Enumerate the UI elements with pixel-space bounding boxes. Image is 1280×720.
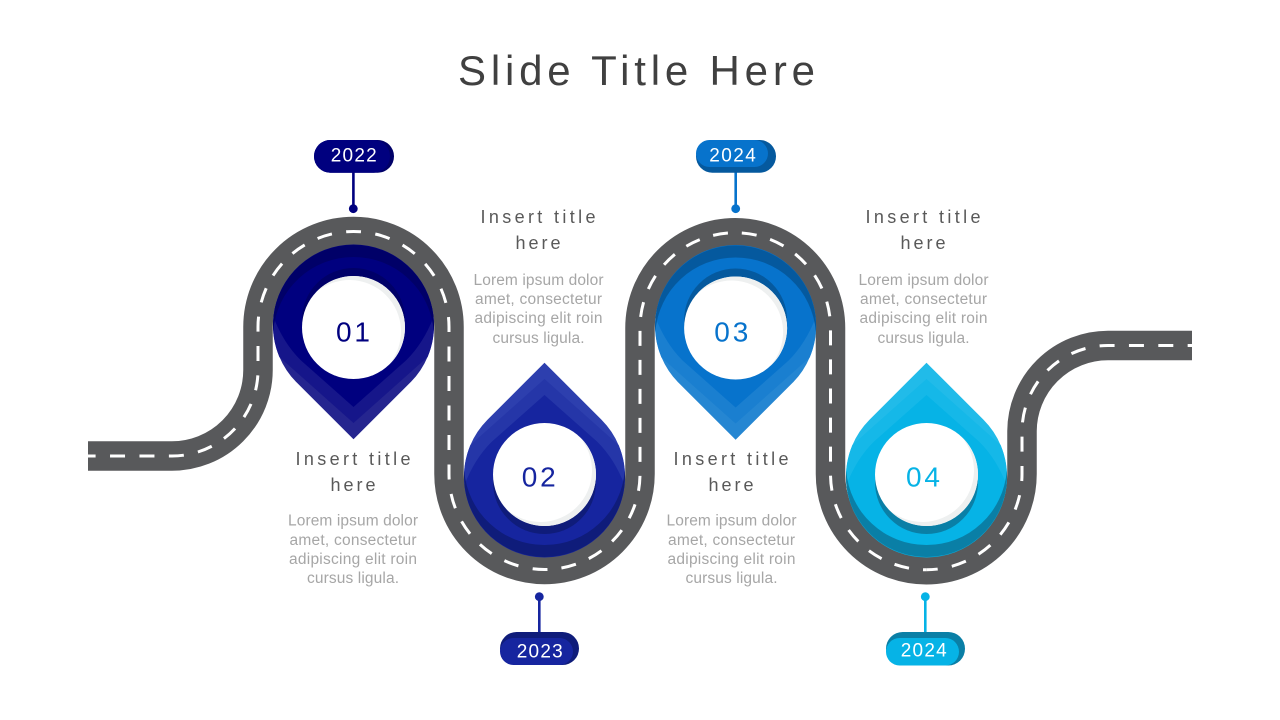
text block 3: here — [708, 475, 754, 495]
year tag 2024 bottom — [886, 592, 965, 666]
text block 4: Insert title — [866, 207, 980, 227]
text block 2: Lorem ipsum dolor — [474, 272, 604, 289]
text block 4: adipiscing elit roin — [860, 310, 988, 327]
text block 1: amet, consectetur — [290, 532, 416, 549]
text block 2: cursus ligula. — [492, 330, 584, 347]
text block 4: amet, consectetur — [860, 291, 987, 308]
text block 3: adipiscing elit roin — [668, 551, 796, 568]
text block 3: amet, consectetur — [668, 532, 795, 549]
text block 1: adipiscing elit roin — [289, 551, 417, 568]
text block 2: here — [516, 233, 560, 253]
text block 3: cursus ligula. — [686, 570, 778, 587]
year tag 2023: 2023 — [517, 641, 563, 662]
year tag 2024 top: 2024 — [709, 146, 756, 167]
pin 02 — [464, 363, 625, 557]
text block 1: Insert title — [296, 449, 410, 469]
number 02: 02 — [522, 462, 556, 493]
year tag 2024 top — [696, 140, 776, 213]
text block 2: amet, consectetur — [475, 291, 602, 308]
pin 01 — [273, 245, 434, 439]
text block 4: Lorem ipsum dolor — [858, 272, 988, 289]
text block 2: Insert title — [480, 207, 596, 227]
number 01: 01 — [336, 317, 370, 348]
text block 2 — [474, 207, 604, 347]
text block 1 — [288, 449, 418, 587]
text block 4: here — [900, 233, 946, 253]
text block 3: Insert title — [674, 449, 788, 469]
pin 04 — [846, 363, 1007, 557]
number 03: 03 — [714, 317, 748, 348]
text block 4 — [858, 207, 988, 347]
text block 1: cursus ligula. — [307, 570, 399, 587]
text block 4: cursus ligula. — [878, 330, 970, 347]
text block 3 — [666, 449, 796, 587]
text block 3: Lorem ipsum dolor — [666, 512, 796, 530]
text block 1: here — [330, 475, 376, 495]
year tag 2023 — [500, 592, 579, 665]
winding road — [88, 232, 1192, 570]
text block 1: Lorem ipsum dolor — [288, 512, 418, 530]
title: Slide Title Here — [458, 47, 815, 94]
number 04: 04 — [906, 462, 940, 493]
year tag 2024 bottom: 2024 — [901, 641, 947, 662]
text block 2: adipiscing elit roin — [474, 310, 602, 327]
year tag 2022: 2022 — [331, 146, 377, 167]
year tag 2022 — [314, 140, 394, 213]
pin 03 — [655, 245, 816, 440]
